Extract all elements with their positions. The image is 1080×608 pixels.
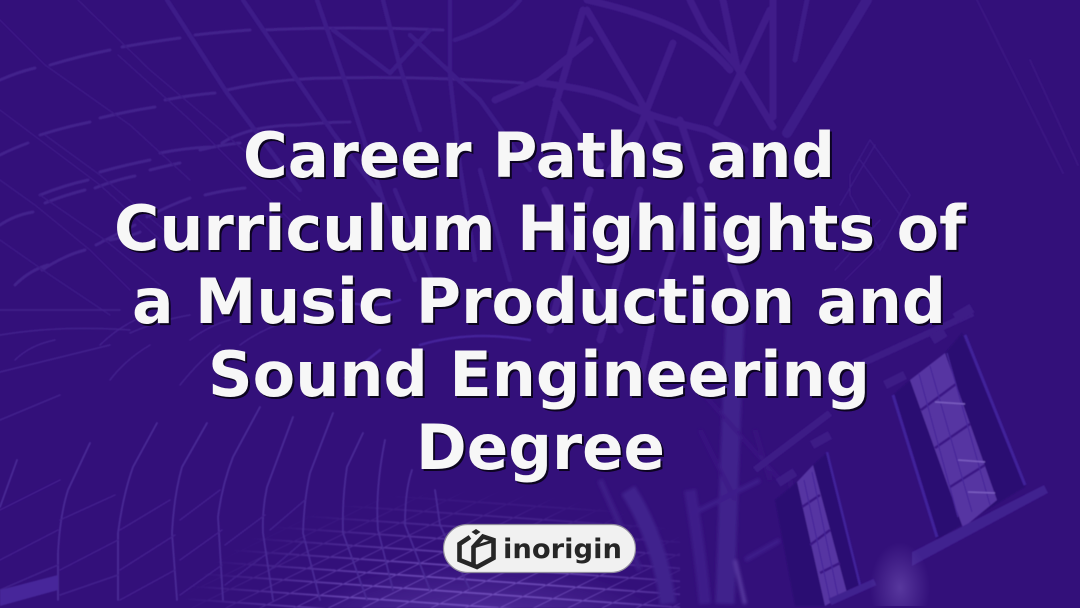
logo pill [444, 524, 636, 572]
logo wordmark: inorigin [503, 534, 622, 565]
background: light glow on the wall [870, 515, 930, 606]
title line 5: Degree [416, 411, 665, 484]
title line 1: Career Paths and [243, 119, 835, 192]
icon: hexagon logo mark [460, 529, 494, 567]
background: small window [755, 413, 875, 606]
title line 4: Sound Engineering [208, 338, 870, 411]
background: central column and struts [600, 320, 810, 604]
title [114, 119, 967, 484]
title line 2: Curriculum Highlights of [114, 192, 967, 265]
logo badge [444, 524, 636, 572]
background: large window [863, 308, 1048, 566]
title line 3: a Music Production and [132, 265, 946, 338]
